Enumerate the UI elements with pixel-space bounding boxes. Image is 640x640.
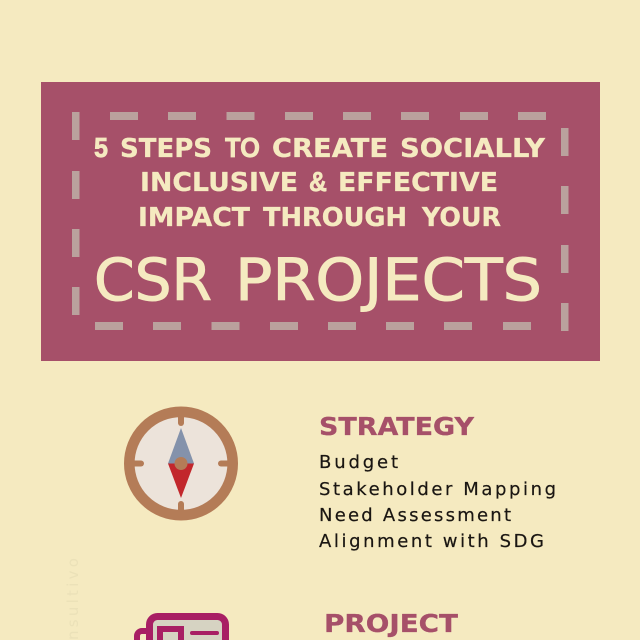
heading: title lines: CREATE (272, 134, 388, 164)
heading: project: PROJECT (324, 609, 458, 638)
heading: title lines: & (309, 166, 327, 197)
icon: newspaper (137, 616, 226, 640)
heading: title lines (94, 132, 546, 233)
heading: title lines: TO (225, 132, 260, 163)
list: strategy items (319, 452, 556, 552)
list: strategy items: Alignment with SDG (319, 531, 544, 552)
text block: strategy (319, 412, 556, 552)
watermark: vertical text: nsultivo (64, 558, 82, 640)
heading: CSR PROJECTS: CSR (94, 246, 212, 314)
icon: compass (129, 412, 233, 515)
heading: CSR PROJECTS (94, 246, 542, 314)
list: strategy items: Stakeholder Mapping (319, 479, 556, 500)
heading: title lines: INCLUSIVE (140, 168, 298, 198)
heading: CSR PROJECTS: PROJECTS (235, 246, 542, 314)
heading: title lines: IMPACT (138, 203, 250, 233)
list: strategy items: Budget (319, 452, 398, 473)
list: strategy items: Need Assessment (319, 505, 511, 526)
heading: title lines: THROUGH (263, 203, 407, 233)
heading: strategy: STRATEGY (319, 412, 475, 441)
heading: title lines: SOCIALLY (400, 134, 546, 164)
heading: title lines: YOUR (421, 203, 501, 233)
heading: title lines: EFFECTIVE (338, 168, 498, 198)
panel: title banner (41, 82, 600, 361)
heading: title lines: STEPS (120, 134, 212, 164)
heading: title lines: 5 (94, 132, 108, 163)
